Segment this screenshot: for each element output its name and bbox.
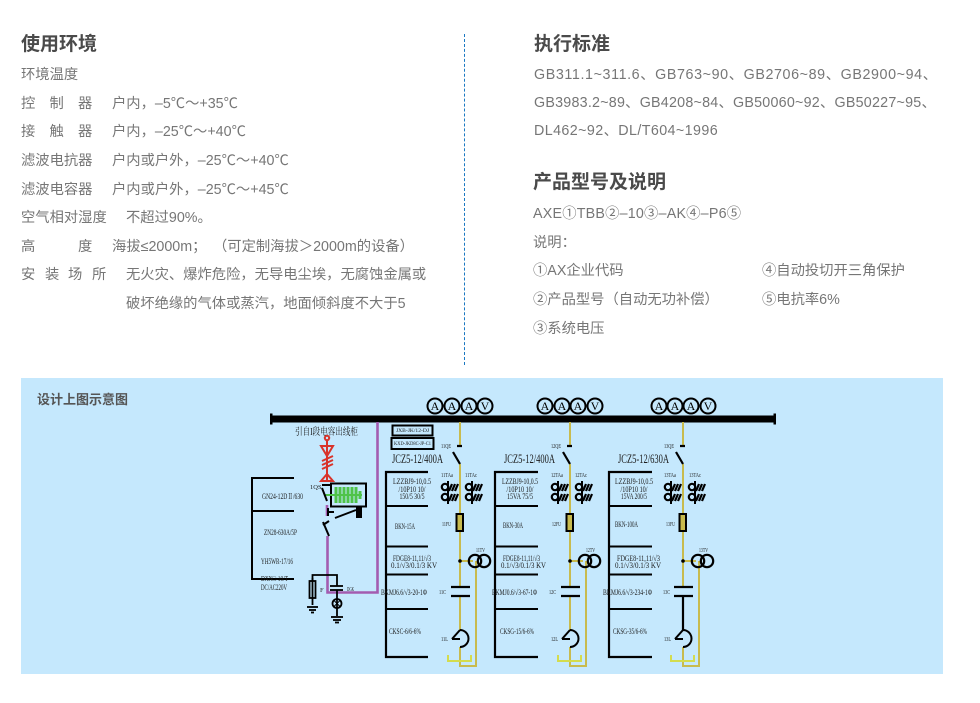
meters group 3: A <box>671 399 680 413</box>
capacitor feeder 1: 11QE <box>441 444 451 450</box>
row: installation site: 破坏绝缘的气体或蒸汽，地面倾斜度不大于5 <box>126 296 406 312</box>
meters group 1: A <box>448 399 457 413</box>
row: installation site: 所 <box>92 267 106 283</box>
feeder 1 circuit <box>442 422 490 666</box>
capacitor feeder 3: FDGE8-11,11/√3 <box>617 554 660 563</box>
text: model code: AXE①TBB②–10③–AK④–P6⑤ <box>533 206 741 222</box>
meters group 2: A <box>558 399 567 413</box>
fuse, capacitor and earth branch <box>307 575 354 622</box>
capacitor feeder 1: /10P10 10/ <box>398 485 426 494</box>
panel: operating environment <box>21 34 426 312</box>
capacitor feeder 3: 13TV <box>699 548 708 554</box>
meters group 2: A <box>574 399 583 413</box>
capacitor feeder 2: CKSG-15/6-6% <box>500 627 534 636</box>
row: controller: 制 <box>50 96 64 112</box>
purple cable <box>328 422 378 592</box>
capacitor feeder 2: BKN-30A <box>503 521 523 530</box>
capacitor feeder 1: JCZ5-12/400A <box>392 451 443 466</box>
text: item 3: ③系统电压 <box>533 321 604 337</box>
row: relative humidity <box>21 210 212 226</box>
text: item 1: ①AX企业代码 <box>533 263 624 279</box>
text: standards list: GB311.1~311.6、GB763~90、GB2706~89、GB2900~94、 <box>534 67 938 83</box>
capacitor feeder 3: 13TAc <box>689 473 701 479</box>
capacitor feeder 1: 11TV <box>476 548 485 554</box>
capacitor feeder 3 <box>603 422 713 666</box>
row: altitude: 海拔≤2000m； <box>112 239 206 255</box>
capacitor feeder 2: 12TAc <box>575 473 587 479</box>
capacitor feeder 2: 12QE <box>551 444 561 450</box>
meters group 2 <box>538 398 602 414</box>
capacitor feeder 3: 13FU <box>666 522 675 528</box>
heading: schematic title: 设计上图示意图 <box>37 392 128 407</box>
left protection cabinet: YH5WR-17/16 <box>261 557 293 566</box>
capacitor feeder 2: 12C <box>549 590 556 596</box>
capacitor feeder 2: 0.1/√3/0.1/3 KV <box>501 561 546 570</box>
heading: standards: 执行标准 <box>534 34 610 55</box>
capacitor feeder 1 <box>381 422 490 666</box>
row: installation site <box>21 266 426 312</box>
capacitor feeder 1: 0.1/√3/0.1/3 KV <box>391 561 437 570</box>
capacitor feeder 3: 0.1/√3/0.1/3 KV <box>615 561 661 570</box>
row: filter capacitor: 户内或户外，–25℃～+45℃ <box>112 182 289 198</box>
row: controller <box>21 96 238 112</box>
capacitor feeder 1: FDGE8-11,11/√3 <box>393 554 431 563</box>
capacitor feeder 1: 11FU <box>442 522 451 528</box>
green filter unit <box>310 484 366 506</box>
row: filter capacitor <box>21 182 289 198</box>
meters group 1 <box>428 398 492 414</box>
meters group 3: A <box>687 399 696 413</box>
capacitor feeder 3: LZZBJ9-10,0.5 <box>615 477 653 486</box>
row: altitude: 高 <box>21 239 35 255</box>
capacitor feeder 3: CKSG-35/6-6% <box>613 627 647 636</box>
capacitor feeder 1: CKSC-6/6-6% <box>389 627 421 636</box>
capacitor feeder 2 <box>492 422 600 666</box>
capacitor feeder 1: 11TAc <box>465 473 477 479</box>
row: filter capacitor: 滤波电容器 <box>21 182 92 198</box>
text: ambient temperature: 环境温度 <box>21 67 78 83</box>
text: item 4: ④自动投切开三角保护 <box>762 263 905 279</box>
row: installation site: 安 <box>21 267 35 283</box>
capacitor feeder 3: BKN-100A <box>615 520 638 529</box>
nameplate boxes: KXD-JKD8C-JP-C1 <box>394 442 431 447</box>
capacitor feeder 2: 12TV <box>586 548 595 554</box>
fuse, capacitor and earth branch: F <box>320 587 324 594</box>
text: standards list <box>534 67 938 139</box>
left protection cabinet: GN24-12DⅡ/630 <box>262 492 303 501</box>
row: filter reactor <box>21 152 289 169</box>
meters group 3: A <box>655 399 664 413</box>
red surge arrester <box>321 436 333 482</box>
left protection cabinet: DXN□-10/T <box>261 575 289 583</box>
row: contactor: 器 <box>78 124 92 140</box>
row: relative humidity: 不超过90%。 <box>126 210 212 226</box>
row: altitude: （可定制海拔＞2000m的设备） <box>213 239 414 255</box>
row: controller: 控 <box>21 96 35 112</box>
row: controller: 器 <box>78 96 92 112</box>
row: contactor: 接 <box>21 124 35 140</box>
capacitor feeder 3: JCZ5-12/630A <box>618 451 669 466</box>
row: relative humidity: 空气相对湿度 <box>21 210 107 226</box>
text: standards list: DL462~92、DL/T604~1996 <box>534 123 718 139</box>
meters group 1: A <box>465 399 474 413</box>
capacitor feeder 3: 13L <box>664 637 671 643</box>
capacitor feeder 2: 12FU <box>552 522 561 528</box>
nameplate boxes: JXB-JK/12-DJ <box>396 429 429 434</box>
capacitor feeder 3: /10P10 10/ <box>620 485 648 494</box>
text: item 5: ⑤电抗率6% <box>762 292 840 308</box>
row: installation site: 无火灾、爆炸危险，无导电尘埃，无腐蚀金属或 <box>126 267 426 283</box>
capacitor feeder 1: BKN-15A <box>395 522 415 531</box>
row: altitude: 度 <box>78 239 92 255</box>
capacitor feeder 3: 15VA 200/5 <box>621 492 647 501</box>
source label: 引自I段电容出线柜 <box>295 425 358 438</box>
row: installation site: 装 <box>45 267 59 283</box>
capacitor feeder 1: 150/5 30/5 <box>400 492 424 501</box>
capacitor feeder 1: 11TAa <box>441 473 453 479</box>
heading: operating environment: 使用环境 <box>21 34 97 55</box>
text: description label: 说明： <box>533 235 576 251</box>
meters group 2: V <box>591 399 600 413</box>
feeder 3 circuit <box>665 422 713 666</box>
meters group 1: A <box>431 399 440 413</box>
panel: model and description <box>533 172 905 337</box>
main busbar <box>270 414 776 424</box>
meters group 2: A <box>541 399 550 413</box>
capacitor feeder 2: /10P10 10/ <box>506 485 534 494</box>
meters group 1: V <box>481 399 490 413</box>
row: contactor: 户内，–25℃～+40℃ <box>112 124 246 140</box>
row: altitude <box>21 238 414 255</box>
fuse, capacitor and earth branch: DGK <box>347 586 354 593</box>
nameplate boxes <box>392 426 434 449</box>
capacitor feeder 3: 13C <box>663 590 670 596</box>
left protection cabinet <box>252 478 303 592</box>
heading: model and description: 产品型号及说明 <box>533 172 666 193</box>
meters group 3 <box>652 398 716 414</box>
capacitor feeder 2: BKMJ0.6/√3-67-1Φ <box>492 588 537 597</box>
capacitor feeder 2: 12L <box>551 637 558 643</box>
capacitor feeder 2: FDGE8-11,11/√3 <box>503 554 540 563</box>
capacitor feeder 2: JCZ5-12/400A <box>504 451 555 466</box>
capacitor feeder 3: 13QE <box>664 444 674 450</box>
green filter unit: 1QS <box>310 484 322 491</box>
left protection cabinet: ZN28-630A/5P <box>264 528 297 537</box>
capacitor feeder 3: 13TAa <box>664 473 676 479</box>
capacitor feeder 2: 15VA 75/5 <box>507 492 533 501</box>
disconnect switch and earthing <box>322 485 361 536</box>
meters group 3: V <box>704 399 713 413</box>
capacitor feeder 1: 11C <box>439 590 446 596</box>
panel: design schematic <box>21 378 943 674</box>
row: installation site: 场 <box>68 267 82 283</box>
feeder 2 circuit <box>552 422 600 666</box>
left protection cabinet: DC/AC220V <box>261 583 287 592</box>
capacitor feeder 3: BKMJ6.6/√3-234-1Φ <box>603 588 652 597</box>
text: standards list: GB3983.2~89、GB4208~84、GB50060~92、GB50227~95、 <box>534 95 936 111</box>
row: contactor: 触 <box>50 124 64 140</box>
row: filter reactor: 户内或户外，–25℃～+40℃ <box>112 153 289 169</box>
capacitor feeder 2: 12TAa <box>551 473 563 479</box>
row: contactor <box>21 124 246 140</box>
panel: standards <box>534 34 938 139</box>
capacitor feeder 1: BKMJ6.6/√3-20-1Φ <box>381 588 427 597</box>
capacitor feeder 1: LZZBJ9-10,0.5 <box>393 477 431 486</box>
row: controller: 户内，–5℃～+35℃ <box>112 96 238 112</box>
capacitor feeder 1: 11L <box>441 637 448 643</box>
capacitor feeder 2: LZZBJ9-10,0.5 <box>502 477 538 486</box>
text: item 2: ②产品型号（自动无功补偿） <box>533 292 719 308</box>
row: filter reactor: 滤波电抗器 <box>21 153 92 169</box>
